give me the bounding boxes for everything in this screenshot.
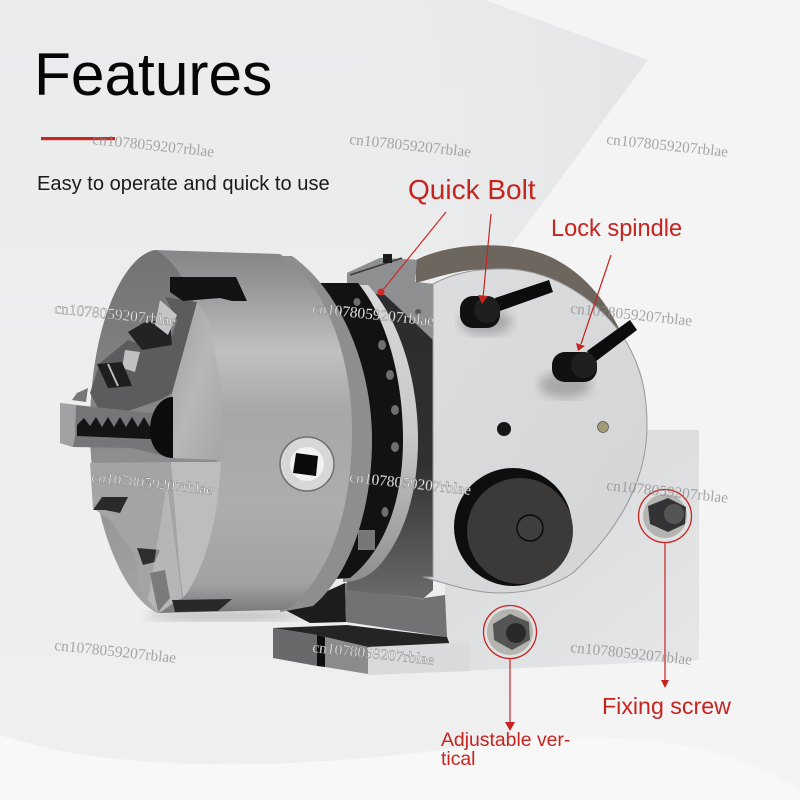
chuck body	[155, 250, 352, 613]
watermarks: cn1078059207rblae	[312, 639, 435, 669]
callout circle: fixing screw	[638, 490, 692, 542]
bracket top	[350, 565, 428, 600]
watermarks: cn1078059207rblae	[54, 300, 177, 330]
dark back arc	[416, 245, 625, 342]
dark mass under chuck	[285, 583, 346, 623]
watermarks: cn1078059207rblae	[349, 131, 472, 161]
watermarks: cn1078059207rblae	[312, 300, 435, 330]
watermarks: cn1078059207rblae	[92, 131, 215, 161]
callout circle: adjustable screw	[484, 606, 536, 658]
base plate	[273, 430, 699, 675]
chuck rear flange	[280, 256, 372, 612]
arrow: fixing screw	[661, 542, 669, 688]
title accent line	[41, 137, 115, 140]
fixing screw	[643, 494, 687, 538]
title: Features	[34, 40, 272, 108]
callout: quick bolt label: Quick Bolt	[408, 174, 536, 205]
lower jaw	[90, 462, 232, 613]
subtitle: Easy to operate and quick to use	[37, 173, 330, 195]
chuck front face	[90, 250, 218, 613]
watermarks: cn1078059207rblae	[570, 300, 693, 330]
side plate	[423, 269, 647, 593]
handle: quick bolt	[460, 280, 553, 335]
index holes	[354, 298, 399, 517]
upper jaw	[90, 277, 247, 418]
watermarks: cn1078059207rblae	[54, 637, 177, 667]
block hole	[415, 309, 421, 315]
watermarks: cn1078059207rblae	[349, 469, 472, 499]
raised centre: upper	[172, 302, 223, 460]
left jaw	[60, 388, 173, 458]
arrow: top dot	[378, 212, 446, 296]
chuck shadow	[145, 611, 305, 621]
raised centre: lower	[167, 462, 221, 598]
callout: adjustable vertical label: Adjustable ver-	[441, 729, 570, 751]
black index disc	[320, 283, 403, 580]
handle: lock spindle	[539, 320, 637, 398]
watermarks	[54, 131, 729, 669]
callout: fixing screw label: Fixing screw	[602, 693, 731, 719]
angle scale ring	[340, 285, 418, 582]
disc bolt	[358, 530, 375, 550]
plate hole	[497, 422, 511, 436]
wedge bracket	[345, 583, 447, 637]
chuck key socket	[280, 437, 334, 491]
watermarks: cn1078059207rblae	[570, 639, 693, 669]
watermarks: cn1078059207rblae	[606, 131, 729, 161]
indicator bolt	[350, 254, 402, 275]
plate pin	[598, 422, 608, 432]
callout: lock spindle label: Lock spindle	[551, 216, 682, 242]
mount block top	[347, 258, 433, 340]
mount block	[347, 258, 433, 598]
product: dividing head	[60, 245, 699, 675]
hand wheel	[454, 468, 573, 586]
arrow: lock spindle	[576, 255, 611, 351]
watermarks: cn1078059207rblae	[91, 469, 214, 499]
arrow: adjustable screw	[505, 659, 515, 731]
arrow: quick bolt	[478, 214, 491, 304]
adjustable screw	[487, 609, 533, 655]
callout: adjustable vertical label: tical	[441, 748, 475, 770]
watermarks: cn1078059207rblae	[606, 477, 729, 507]
